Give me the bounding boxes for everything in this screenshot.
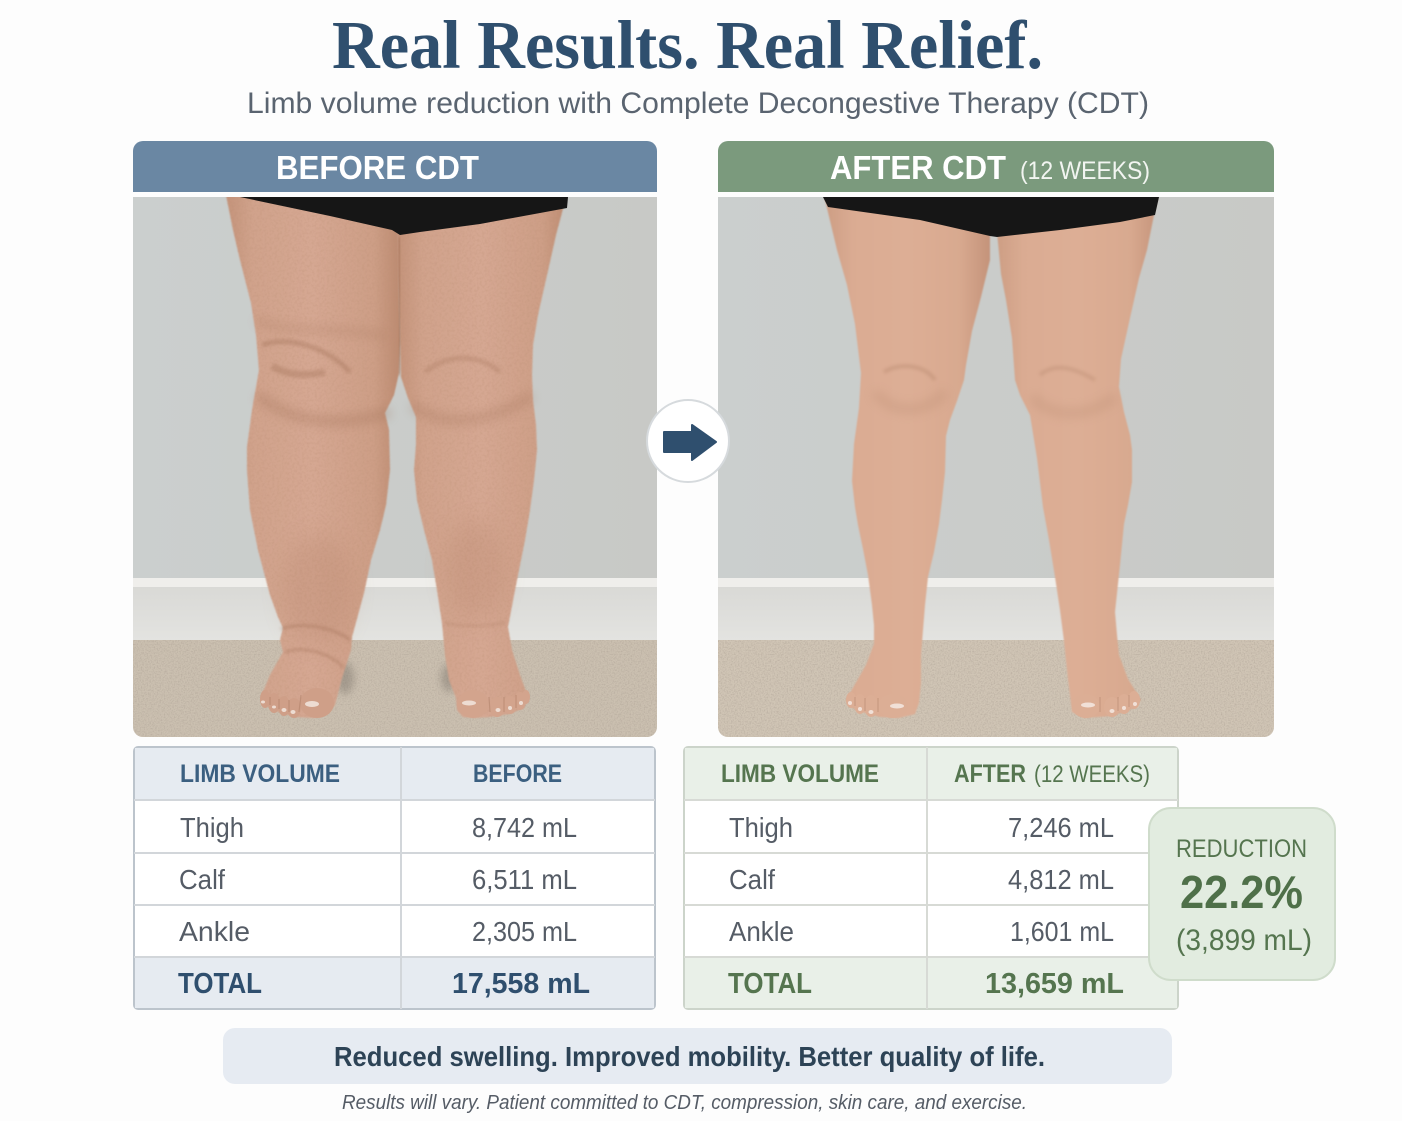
banner: benefits [223,1028,1172,1084]
header row [721,760,1150,788]
toes: before right foot [457,690,530,718]
subtitle: Limb volume reduction with Complete Decongestive Therapy (CDT) [247,87,1149,120]
header row: BEFORE [473,760,562,788]
data rows: Ankle [729,916,794,947]
table: before [134,747,655,1009]
data rows: 7,246 mL [1008,812,1114,843]
panel: before header: BEFORE CDT [276,149,479,186]
data rows: Calf [179,864,225,895]
total row: 13,659 mL [985,968,1124,1000]
shading: before leg details [256,237,532,668]
photo: before CDT legs [133,190,657,737]
header row: LIMB VOLUME [721,760,879,788]
data rows [179,812,577,947]
panel: after header: (12 WEEKS) [1020,157,1150,185]
shadow: feet on carpet [336,662,457,694]
toes: after left foot [846,692,908,718]
leg: before, right side of image [397,190,568,718]
panel: after header: AFTER CDT [830,149,1006,186]
total row: 17,558 mL [452,968,590,1000]
panel: before header [133,141,657,192]
data rows: Calf [729,864,775,895]
leg: after, left side of image [822,190,990,718]
header row [180,760,562,788]
header row: AFTER [954,760,1026,788]
data rows: 4,812 mL [1008,864,1114,895]
callout: reduction: 22.2% [1180,866,1303,918]
leg: after, right side of image [993,190,1160,718]
footnote: Results will vary. Patient committed to CDT, compression, skin care, and exercise. [342,1092,1027,1114]
header row: LIMB VOLUME [180,760,340,788]
data rows: 2,305 mL [472,916,577,947]
total row [178,968,590,1000]
shorts: before [240,197,568,235]
data rows: 1,601 mL [1010,916,1114,947]
shorts: after [823,197,1159,237]
data rows: Thigh [729,812,793,843]
toes: before left foot [260,688,334,718]
total row: TOTAL [178,968,262,1000]
data rows: 8,742 mL [472,812,577,843]
shading: before calf darkening [293,532,496,634]
callout: reduction: (3,899 mL) [1176,924,1312,957]
callout: reduction [1149,808,1335,980]
callout: reduction: REDUCTION [1176,835,1307,863]
banner: benefits: Reduced swelling. Improved mobility. Better quality of life. [334,1041,1045,1072]
data rows: 6,511 mL [472,864,577,895]
total row: TOTAL [728,968,812,1000]
arrow badge [647,400,729,482]
title: Real Results. Real Relief. [332,7,1043,83]
table: after [684,747,1178,1009]
total row [728,968,1124,1000]
data rows [729,812,1114,947]
header row: (12 WEEKS) [1034,761,1150,788]
panel: after header [718,141,1274,192]
shading: after leg details [884,364,1094,380]
leg: before, left side of image [225,190,400,718]
data rows: Thigh [180,812,244,843]
data rows: Ankle [179,916,250,947]
photo: after CDT legs [718,190,1274,737]
toes: after right foot [1072,691,1140,718]
